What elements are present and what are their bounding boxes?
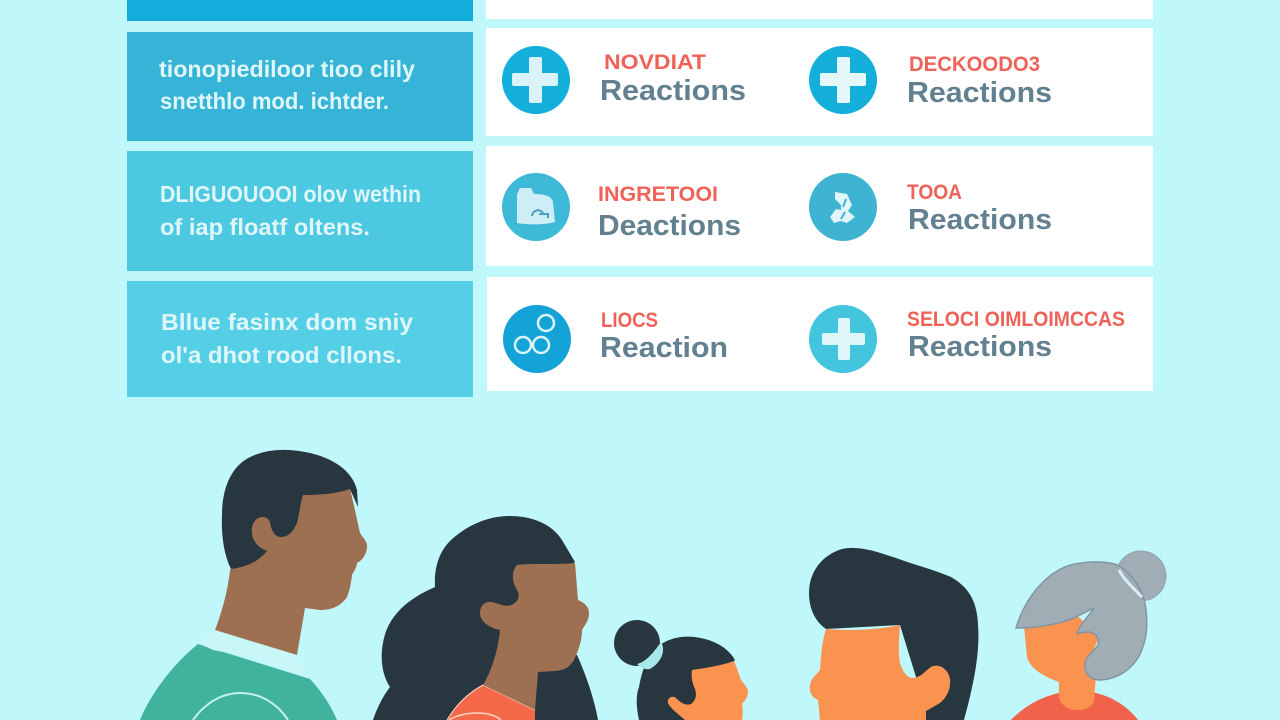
figure: child with hair bun [614, 620, 748, 720]
reaction label 2: DECKOODO3 [909, 53, 1040, 76]
row 1 reactions card [486, 28, 1153, 136]
reaction label 4: Reactions [908, 204, 1052, 236]
reaction label 5: Reaction [600, 332, 728, 364]
panel: row 1 [127, 28, 1153, 141]
panel: top row, cropped [127, 0, 1153, 21]
icon: medical plus [809, 46, 877, 114]
reaction label 4 [907, 181, 1052, 236]
icon: squiggle allergen [809, 173, 877, 241]
figure: grandmother with grey bun [1011, 551, 1166, 720]
reaction label 2: Reactions [907, 77, 1052, 109]
row 1 description block: tionopiediloor tioo clily [159, 56, 415, 82]
row 2 reactions card [486, 146, 1153, 266]
row 3 reactions card [487, 277, 1153, 391]
row 1 description block [127, 32, 473, 141]
panel: row 3 [127, 277, 1153, 397]
reaction label 6: SELOCI OIMLOIMCCAS [907, 308, 1125, 331]
reaction label 5 [600, 309, 728, 364]
reaction label 6 [907, 308, 1125, 363]
figure: man in green shirt [140, 450, 367, 720]
panel: row 2 [127, 146, 1153, 271]
row 3 description block: Bllue fasinx dom sniy [161, 309, 413, 335]
icon: food container [502, 173, 570, 241]
icon: medical plus [502, 46, 570, 114]
reaction label 3: INGRETOOI [598, 183, 718, 206]
reaction label 1: Reactions [600, 75, 746, 107]
row 1 description block: snetthlo mod. ichtder. [160, 88, 389, 114]
icon: medical plus [809, 305, 877, 373]
reaction label 3: Deactions [598, 210, 741, 242]
reaction label 1: NOVDIAT [604, 51, 706, 74]
row 2 description block: of iap floatf oltens. [160, 214, 370, 240]
reaction label 4: TOOA [907, 181, 962, 204]
reaction label 5: LIOCS [601, 309, 658, 332]
figure: man with orange skin [809, 548, 978, 720]
row 3 description block: ol'a dhot rood cllons. [161, 342, 402, 368]
reaction label 1 [600, 51, 746, 107]
reaction label 6: Reactions [908, 331, 1052, 363]
icon: linked rings [503, 305, 571, 373]
reaction label 2 [907, 53, 1052, 109]
reaction label 3 [598, 183, 741, 242]
illustration: family group [140, 450, 1166, 720]
row 3 description block [127, 281, 473, 397]
row 2 description block: DLIGUOUOOI olov wethin [160, 181, 421, 207]
row 2 description block [127, 151, 473, 271]
figure: woman in red shirt [373, 516, 598, 720]
